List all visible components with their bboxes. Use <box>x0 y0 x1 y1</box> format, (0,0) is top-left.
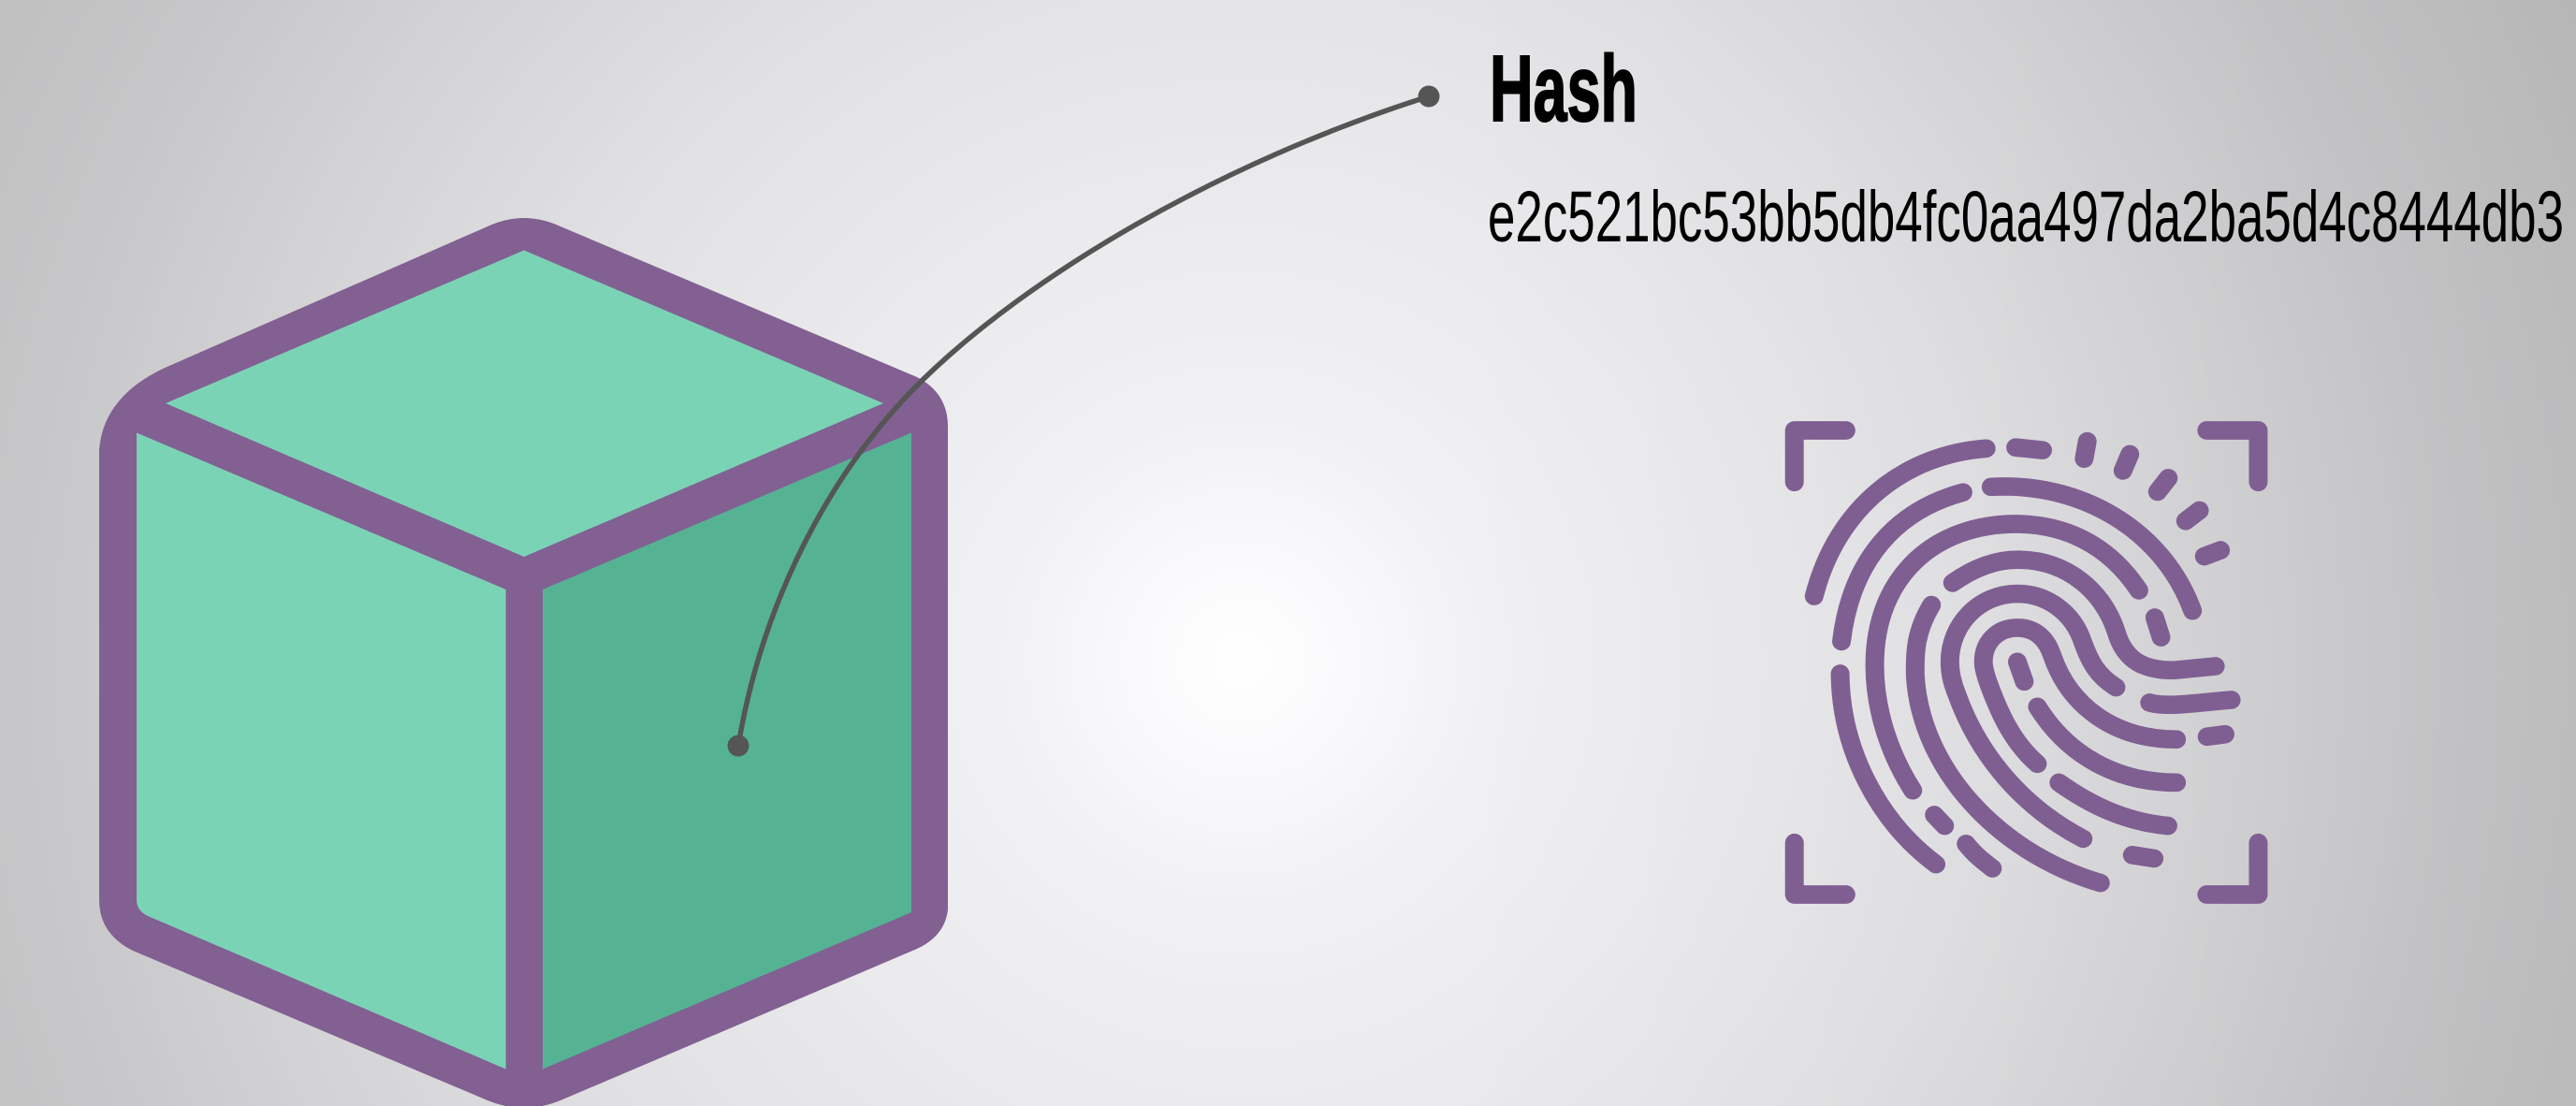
cube left face <box>137 432 506 1069</box>
icon: cube <box>99 218 948 1106</box>
heading: Hash: Hash <box>1490 36 1637 141</box>
cube outline <box>99 218 948 1106</box>
cube top face <box>166 251 883 557</box>
connector line from cube to hash label <box>728 86 1439 756</box>
icon: fingerprint scan <box>1795 430 2258 895</box>
cube right face <box>543 432 911 1069</box>
